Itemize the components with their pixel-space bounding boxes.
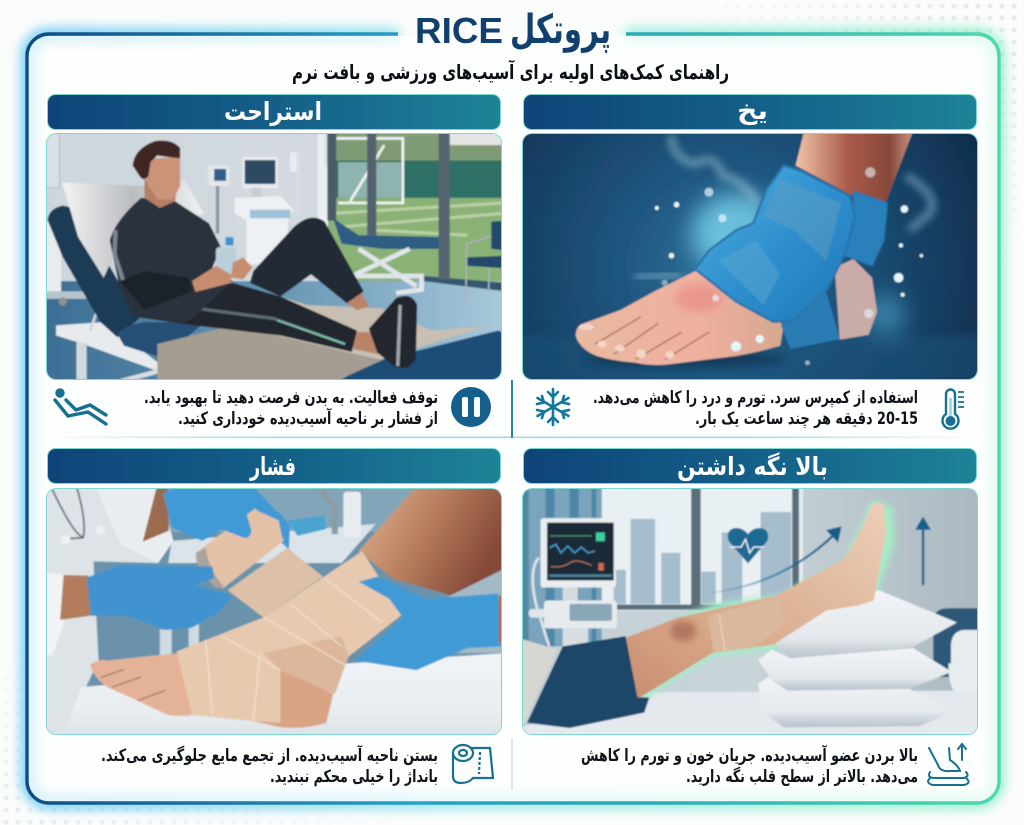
title: RICE (415, 10, 503, 51)
heading: elevation (523, 448, 977, 484)
text: ice description: 20-15 دقیقه هر چند ساعت یک بار. (695, 409, 918, 429)
icon: thermometer (942, 390, 964, 429)
icon: pause (451, 387, 491, 427)
heading: elevation: بالا نگه داشتن (677, 452, 828, 482)
photo: man resting on treatment bed (47, 134, 501, 379)
title: پروتکل (510, 8, 611, 53)
heading: ice (523, 94, 977, 130)
panel: elevation (522, 448, 978, 787)
text: compression description: بانداژ را خیلی محکم نبندید. (270, 767, 438, 787)
panel: compression (46, 448, 502, 787)
icon: bandage roll (453, 745, 493, 783)
panel: ice (522, 94, 978, 430)
text: elevation description (581, 744, 918, 787)
photo: foot with ice pack (523, 134, 977, 379)
panel: rest (46, 94, 502, 429)
heading: compression: فشار (249, 452, 296, 481)
icon: reclining person (55, 390, 106, 424)
heading: compression (47, 448, 501, 484)
photo: leg elevated on pillows (523, 489, 977, 734)
caption: ice (536, 388, 964, 430)
heading: ice: یخ (737, 96, 768, 126)
caption: rest (53, 387, 491, 429)
text: compression description (101, 744, 438, 787)
icon: elevated foot on pillows (928, 744, 969, 785)
text: rest description (144, 388, 438, 429)
icon: snowflake (537, 389, 569, 425)
caption: compression (101, 744, 494, 787)
title (415, 8, 611, 53)
photo: gloved hands bandaging ankle (47, 489, 501, 734)
text: ice description (593, 388, 918, 429)
heading: rest: استراحت (224, 97, 322, 127)
caption: elevation (581, 742, 970, 787)
heading: rest (47, 94, 501, 130)
